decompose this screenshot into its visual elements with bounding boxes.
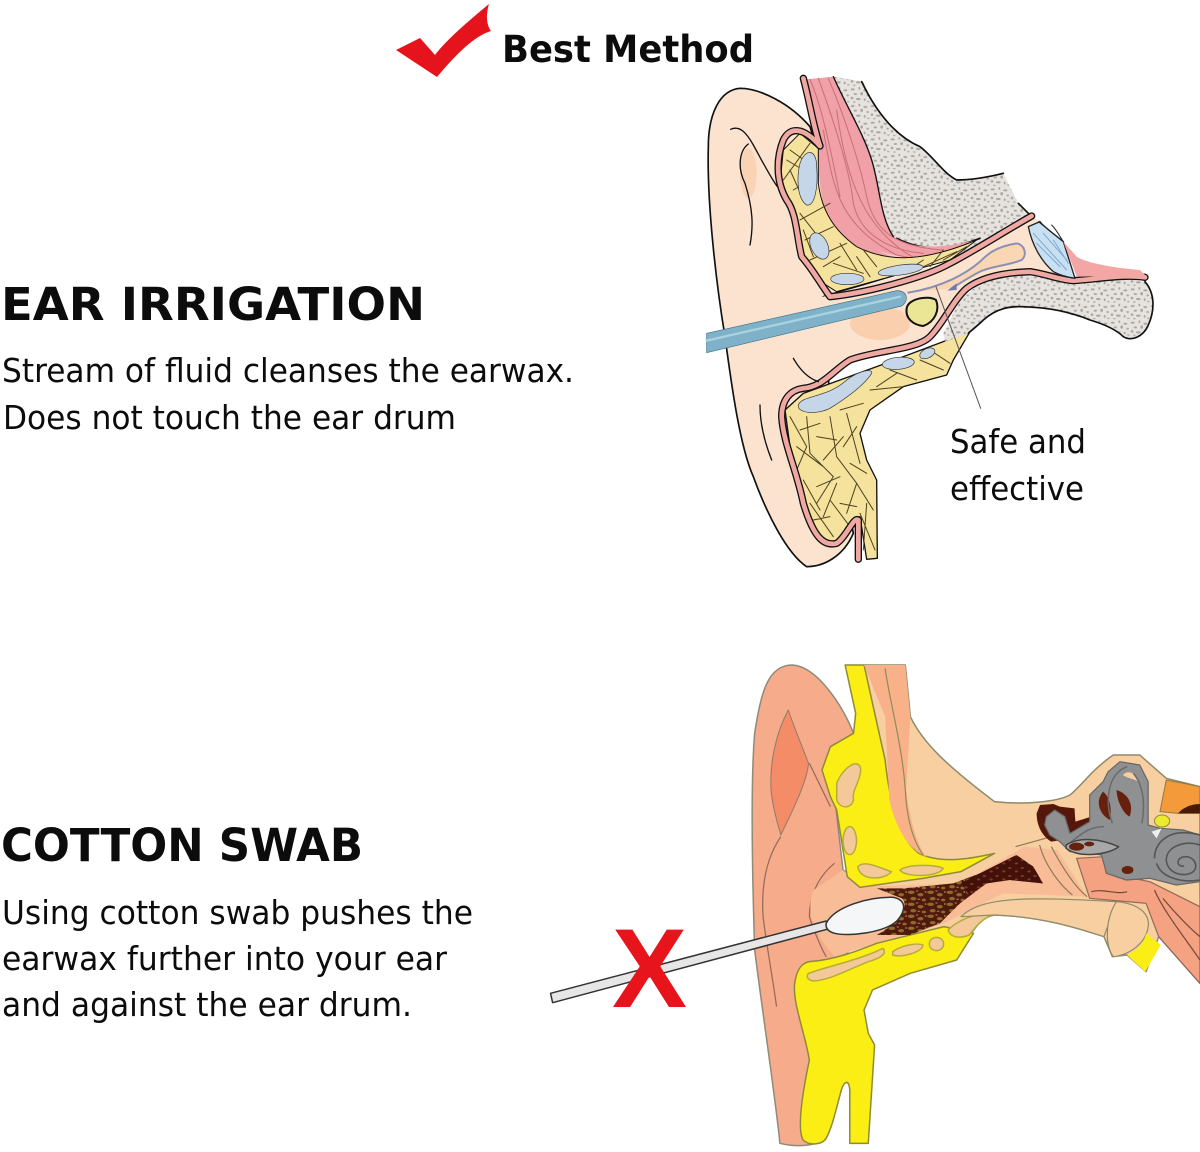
swab shaft — [551, 921, 827, 1003]
jaw and lower canal — [961, 899, 1117, 937]
heading: ear irrigation: EAR IRRIGATION — [1, 278, 425, 331]
ear drum — [1028, 222, 1075, 278]
upper canal wall — [778, 78, 1032, 297]
inner ear bone — [1045, 762, 1200, 885]
inner ear — [1037, 762, 1200, 885]
lower fatty tissue and earlobe — [785, 332, 970, 559]
cartilage, lower — [807, 914, 995, 981]
head tissue — [860, 665, 1200, 983]
fluid stream arrow — [908, 243, 1025, 293]
heading: best method: Best Method — [502, 28, 754, 71]
blue cartilage, upper — [798, 152, 924, 285]
muscle — [800, 77, 977, 262]
description line 1: Using cotton swab pushes the — [2, 893, 473, 932]
earwax at inner ear — [1037, 804, 1092, 842]
swab cotton tip — [826, 897, 904, 935]
ear canal — [757, 217, 1077, 390]
icon: red X: X — [612, 906, 687, 1031]
ear drum line — [1016, 837, 1087, 897]
description line 2: earwax further into your ear — [2, 939, 447, 978]
lower bone — [943, 270, 1153, 342]
lower canal wall — [782, 272, 1145, 559]
lower yellow tissue and lobe — [794, 927, 974, 1144]
description line 1: Stream of fluid cleanses the earwax. — [2, 351, 574, 390]
eustachian tube — [1077, 857, 1200, 983]
pinna — [708, 88, 957, 567]
impacted earwax — [877, 855, 1043, 935]
cotton swab — [551, 897, 904, 1003]
description line 2: Does not touch the ear drum — [3, 398, 456, 437]
illustration: cotton swab cross-section — [551, 665, 1200, 1146]
leader line — [936, 287, 981, 408]
text block: cotton swab — [1, 819, 473, 1024]
text block: ear irrigation — [1, 278, 574, 437]
callout line 1: Safe and — [950, 422, 1086, 461]
cochlea spiral — [1154, 833, 1200, 881]
pinna — [752, 665, 872, 1146]
upper fatty tissue — [780, 133, 977, 292]
earwax plug — [906, 298, 937, 326]
illustration: ear irrigation cross-section — [707, 77, 1153, 567]
heading: cotton swab: COTTON SWAB — [1, 819, 363, 872]
callout: safe and effective — [950, 422, 1086, 508]
pinna fold lines — [731, 128, 818, 460]
ear canal — [810, 847, 1087, 957]
icon: red check mark — [396, 4, 491, 77]
blue cartilage, lower — [798, 346, 937, 412]
irrigation tube — [707, 291, 906, 353]
callout line 2: effective — [950, 469, 1084, 508]
skull bone, upper — [833, 77, 1033, 257]
upper yellow tissue — [822, 665, 995, 887]
description line 3: and against the ear drum. — [2, 985, 412, 1024]
cartilage, upper — [837, 764, 943, 878]
